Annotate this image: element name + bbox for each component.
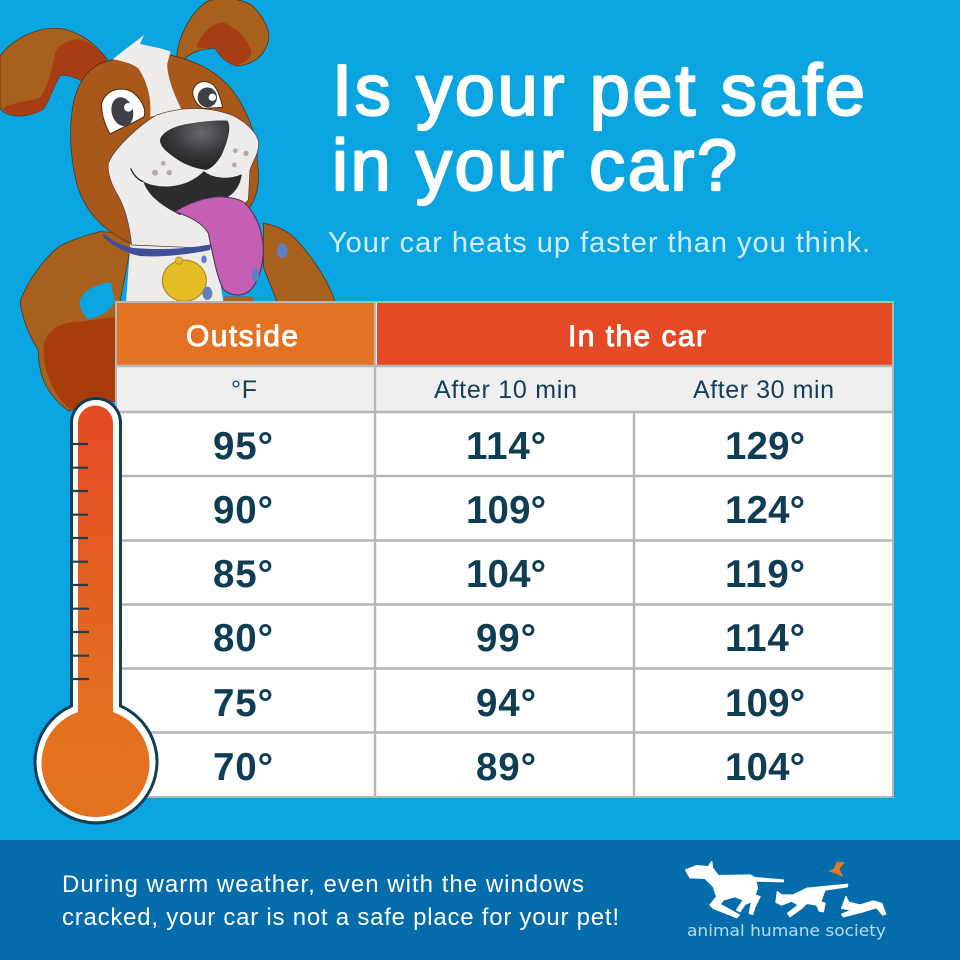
footer message: During warm weather, even with the windows — [62, 871, 584, 898]
row: 70: 104° — [725, 746, 805, 789]
footer message: cracked, your car is not a safe place for your pet! — [62, 904, 619, 931]
row: 80: 80° — [213, 617, 273, 660]
dog tag — [162, 257, 212, 301]
subtitle: Your car heats up faster than you think. — [328, 227, 870, 259]
row: 75: 109° — [725, 682, 805, 725]
logo: animal humane society — [686, 862, 886, 940]
header: in the car: In the car — [568, 320, 706, 353]
sub-header row: After 10 min — [434, 376, 577, 404]
head blaze — [113, 35, 183, 117]
eyes — [102, 89, 145, 134]
title — [332, 51, 865, 206]
title: in your car? — [332, 126, 737, 206]
nose — [160, 120, 229, 170]
row: 95: 95° — [213, 425, 273, 468]
footer message — [62, 871, 619, 931]
row: 75: 94° — [476, 682, 536, 725]
row: 85: 119° — [725, 553, 805, 596]
logo wordmark: animal humane society — [687, 921, 886, 940]
title: Is your pet safe — [332, 51, 865, 131]
illustration: cartoon dog — [0, 0, 335, 411]
header: outside — [117, 303, 374, 365]
row: 90: 90° — [213, 489, 273, 532]
row: 90: 109° — [466, 489, 546, 532]
header: outside: Outside — [186, 320, 298, 353]
row: 70: 70° — [213, 746, 273, 789]
row: 95: 129° — [725, 425, 805, 468]
row: 95 — [213, 425, 805, 468]
row: 90 — [213, 489, 805, 532]
row: 85: 85° — [213, 553, 273, 596]
row: 70 — [213, 746, 805, 789]
mouth — [143, 172, 242, 215]
sub-header row: °F — [231, 376, 257, 404]
logo bird — [828, 862, 845, 877]
row: 75 — [213, 682, 805, 725]
dog collar — [103, 233, 211, 256]
row: 70: 89° — [476, 746, 536, 789]
row: 75: 75° — [213, 682, 273, 725]
row: 85 — [213, 553, 805, 596]
header: in the car — [377, 303, 892, 365]
dog arms and body — [20, 223, 335, 411]
dog tongue — [175, 197, 263, 295]
table background — [116, 302, 893, 797]
muzzle — [108, 109, 259, 248]
row: 80 — [213, 617, 805, 660]
row: 80: 114° — [725, 617, 805, 660]
dog right ear — [177, 0, 269, 66]
row: 90: 124° — [725, 489, 805, 532]
dog left ear — [0, 28, 107, 116]
sub-header row — [117, 367, 892, 411]
logo cat and rabbit — [776, 884, 886, 917]
dog head — [71, 35, 259, 248]
row: 80: 99° — [476, 617, 536, 660]
row: 95: 114° — [466, 425, 546, 468]
row: 85: 104° — [466, 553, 546, 596]
thermometer — [35, 398, 157, 823]
logo dog — [686, 862, 783, 918]
footer band — [0, 840, 960, 960]
sub-header row: After 30 min — [693, 376, 834, 404]
data table — [116, 302, 893, 797]
